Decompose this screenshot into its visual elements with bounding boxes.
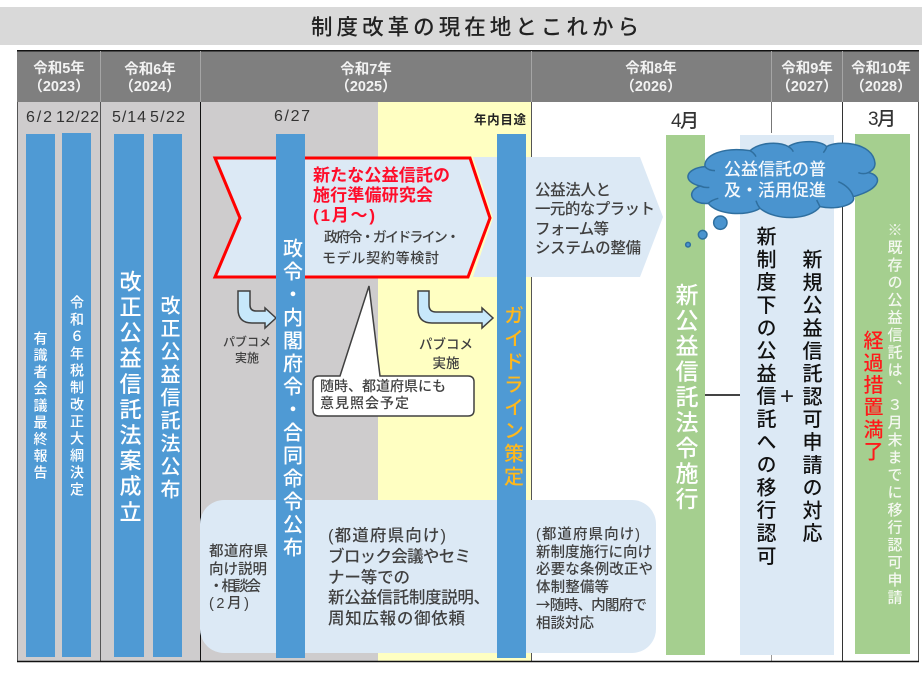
bar: transition period ends: [855, 134, 910, 654]
bar: transition period ends: ※既存の公益信託は、３月末までに移行認可申請: [886, 222, 902, 607]
year header row: 令和7年: [340, 60, 392, 78]
title band: 制度改革の現在地とこれから: [311, 16, 639, 40]
panel: prefecture guidance: 体制整備等: [536, 578, 609, 596]
year header row: [17, 50, 919, 102]
arrow: public comment 1: 実施: [235, 350, 259, 365]
panel: prefecture guidance: 新制度施行に向け: [536, 544, 652, 561]
bar: cabinet orders promulgated: 政令・内閣府令・合同命令公布: [280, 238, 302, 560]
callout: prefecture consultation: [313, 286, 474, 416]
red arrow band: research committee: 政府令・ガイドライン・: [324, 229, 460, 245]
year header row: 令和9年: [781, 59, 833, 77]
year header row: （2027）: [776, 78, 838, 95]
panel: transition and new applications: 新制度下の公益信託への移行認可: [753, 226, 776, 568]
bar: new law enforcement: [666, 135, 705, 655]
arrow: public comment 2: パブコメ: [419, 336, 473, 352]
panel: prefecture guidance: 新公益信託制度説明、: [328, 588, 490, 607]
date labels: 3月: [868, 109, 896, 130]
panel: prefecture guidance: [200, 500, 656, 653]
panel: prefecture guidance: (2月): [209, 596, 249, 612]
red arrow band: research committee: 施行準備研究会: [313, 185, 433, 205]
arrow band: platform system: [473, 157, 663, 277]
bar: law promulgated: [153, 134, 182, 657]
panel: prefecture guidance: ナー等での: [328, 568, 410, 587]
bar: bill passed: 改正公益信託法案成立: [116, 270, 142, 526]
title band: [0, 7, 922, 45]
year header row: 令和10年: [851, 59, 911, 77]
cloud: promote use of public trusts: 及・活用促進: [724, 181, 826, 200]
panel: prefecture guidance: ・相談会: [209, 578, 262, 595]
arrow band: platform system: 公益法人と: [535, 181, 611, 199]
red arrow band: research committee: モデル契約等検討: [322, 250, 439, 266]
red arrow band: research committee: 新たな公益信託の: [313, 166, 450, 185]
year header row: （2026）: [620, 78, 682, 95]
date labels: [26, 108, 896, 132]
arrow band: platform system: フォーム等: [535, 220, 609, 238]
year header row: （2023）: [28, 78, 90, 95]
callout: prefecture consultation: 意見照会予定: [320, 395, 409, 411]
red arrow band: research committee: (1月～): [313, 206, 375, 225]
date labels: 年内目途: [474, 112, 526, 127]
bar: expert panel final report: 有識者会議最終報告: [32, 331, 48, 482]
arrow band: platform system: 一元的なプラット: [535, 200, 655, 218]
cloud: promote use of public trusts: 公益信託の普: [724, 160, 826, 179]
bar: cabinet orders promulgated: [276, 134, 305, 658]
date labels: 12/22: [56, 109, 99, 126]
year header row: 令和6年: [124, 60, 176, 78]
bar: expert panel final report: [26, 134, 55, 657]
arrow: public comment 2: [418, 291, 493, 371]
panel: prefecture guidance: 必要な条例改正や: [536, 561, 653, 578]
panel: prefecture guidance: 周知広報の御依頼: [328, 609, 466, 628]
connector line: [705, 394, 740, 396]
panel: prefecture guidance: 相談対応: [536, 615, 594, 632]
bar: bill passed: [114, 134, 144, 657]
bar: new law enforcement: 新公益信託法令施行: [672, 283, 698, 512]
panel: prefecture guidance: (都道府県向け): [328, 526, 446, 545]
panel: prefecture guidance: (都道府県向け): [536, 526, 640, 543]
panel: transition and new applications: +: [780, 383, 794, 410]
bar: guideline: [497, 134, 526, 658]
arrow: public comment 1: パブコメ: [223, 334, 271, 349]
panel: prefecture guidance: 向け説明: [209, 561, 267, 578]
panel: prefecture guidance: →随時、内閣府で: [536, 594, 647, 615]
red arrow band: research committee: [215, 158, 490, 277]
bar: tax reform outline: [62, 133, 91, 657]
year header row: 令和8年: [625, 59, 677, 77]
date labels: 4月: [671, 111, 699, 132]
arrow: public comment 1: [223, 291, 276, 365]
year header row: （2025）: [335, 78, 397, 95]
bar: guideline: ガイドライン策定: [500, 305, 524, 489]
bar: transition period ends: 経過措置満了: [860, 330, 883, 463]
bar: tax reform outline: 令和６年税制改正大綱決定: [69, 295, 85, 499]
bar: law promulgated: 改正公益信託法公布: [157, 295, 180, 502]
arrow band: platform system: システムの整備: [535, 239, 641, 257]
panel: transition and new applications: 新規公益信託認可申請の対応: [799, 249, 822, 545]
year header row: （2028）: [850, 78, 912, 95]
year header row: （2024）: [119, 78, 181, 95]
cloud: promote use of public trusts: [686, 142, 877, 247]
panel: prefecture guidance: 都道府県: [209, 543, 268, 560]
date labels: 6/27: [274, 108, 310, 125]
year header row: 令和5年: [33, 59, 85, 77]
panel: transition and new applications: [740, 135, 834, 655]
date labels: 5/14: [112, 109, 146, 126]
date labels: 6/2: [26, 109, 52, 126]
arrow: public comment 2: 実施: [432, 356, 460, 371]
date labels: 5/22: [150, 109, 185, 126]
panel: prefecture guidance: ブロック会議やセミ: [328, 546, 471, 566]
callout: prefecture consultation: 随時、都道府県にも: [320, 378, 446, 394]
